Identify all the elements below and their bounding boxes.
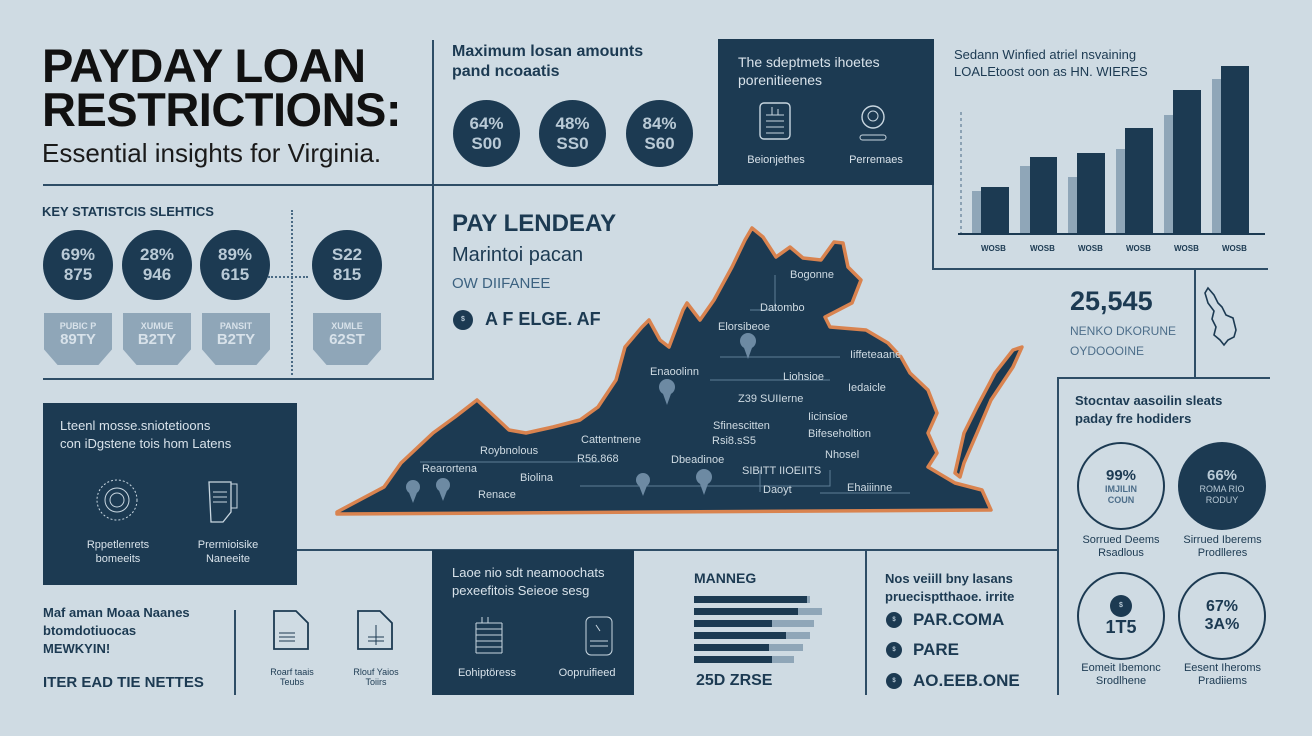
- legend marker: A F ELGE. AF: [485, 309, 601, 329]
- map: Virginia: Datombo: [760, 302, 805, 314]
- list: payday loan providers: pruecisptthaoe. irrite: [885, 589, 1014, 604]
- list: payday loan providers: $: [892, 617, 896, 623]
- key statistics panel: XUMLE: [331, 321, 363, 331]
- panel: dark bottom middle: pexeefitois Seieoe sesg: [452, 583, 589, 598]
- panel: dark left bottom: Prermioisike Naneeite: [198, 539, 258, 565]
- list: payday loan providers: PAR.COMA: [913, 610, 1004, 629]
- map: Virginia: Nhosel: [825, 449, 859, 461]
- map: Virginia: Dbeadinoe: [671, 454, 724, 466]
- title: RESTRICTIONS:: [42, 83, 401, 136]
- panel: payday holder stats: Eesent Iheroms Pradiiems: [1184, 662, 1261, 687]
- map: Virginia: Rearortena: [422, 463, 478, 475]
- panel: dark left bottom: Rppetlenrets bomeeits: [87, 539, 149, 565]
- panel: dark requirements: [718, 39, 934, 185]
- map: Virginia: Roybnolous: [480, 445, 539, 457]
- panel: payday holder stats: RODUY: [1206, 495, 1238, 505]
- panel: dark bottom middle: Eohiptöress: [458, 667, 516, 679]
- text block bottom left: [43, 605, 204, 691]
- bar chart: Sedann Winfied atriel nsvaining: [954, 47, 1136, 62]
- panel: dark bottom middle: [432, 550, 634, 695]
- panel: dark requirements: The sdeptmets ihoetes: [738, 54, 880, 70]
- bar chart: [954, 47, 1265, 253]
- panel: max loan amounts: 48%: [555, 114, 590, 133]
- key statistics panel: B2TY: [217, 331, 255, 348]
- text block bottom left: MEWKYIN!: [43, 641, 110, 656]
- map: Virginia: Enaoolinn: [650, 366, 699, 378]
- panel: payday holder stats: IMJILIN: [1105, 484, 1137, 494]
- panel: max loan amounts: S00: [471, 134, 502, 152]
- map: Virginia: Daoyt: [763, 484, 792, 496]
- text block bottom left: ITER EAD TIE NETTES: [43, 674, 204, 691]
- panel: payday holder stats: Sirrued Iberems Prodlleres: [1183, 534, 1262, 559]
- bar chart: WOSB: [1174, 244, 1199, 253]
- map: Virginia: Iedaicle: [848, 382, 886, 394]
- key statistics panel: [42, 204, 382, 365]
- map: Virginia: Iicinsioe: [808, 411, 848, 423]
- map: Virginia: Elorsibeoe: [718, 321, 770, 333]
- icons: forms: Teubs: [280, 677, 304, 687]
- key statistics panel: 69%: [61, 245, 95, 264]
- map: Virginia: Ehaiiinne: [847, 482, 892, 494]
- horizontal bar chart: [694, 570, 822, 689]
- key statistics panel: 28%: [140, 245, 174, 264]
- key statistics panel: 875: [64, 265, 92, 284]
- bar chart: WOSB: [1030, 244, 1055, 253]
- map: Virginia: Liohsioe: [783, 371, 824, 383]
- map heading: OW DIIFANEE: [452, 275, 550, 292]
- panel: max loan amounts: Maximum losan amounts: [452, 43, 643, 60]
- key statistics panel: KEY STATISTCIS SLEHTICS: [42, 204, 214, 219]
- list: payday loan providers: [885, 571, 1020, 690]
- panel: payday holder stats: COUN: [1108, 495, 1134, 505]
- list: payday loan providers: PARE: [913, 640, 959, 659]
- icon: person: [860, 105, 886, 140]
- key statistics panel: 89%: [218, 245, 252, 264]
- map heading: PAY LENDEAY: [452, 210, 616, 237]
- bar chart: WOSB: [1078, 244, 1103, 253]
- key statistics panel: PUBIC P: [60, 321, 96, 331]
- text block bottom left: btomdotiuocas: [43, 623, 136, 638]
- icons: forms: Rlouf Yaios: [353, 667, 399, 677]
- panel: payday holder stats: paday fre hodiders: [1075, 411, 1191, 426]
- key statistics panel: 62ST: [329, 331, 365, 348]
- stat: 25,545: 25,545: [1070, 286, 1153, 316]
- panel: payday holder stats: 67%: [1206, 598, 1238, 615]
- list: payday loan providers: $: [892, 647, 896, 653]
- bar chart: WOSB: [1222, 244, 1247, 253]
- icons: forms: Roarf taais: [270, 667, 314, 677]
- title: [42, 39, 401, 168]
- key statistics panel: PANSIT: [220, 321, 252, 331]
- key statistics panel: 946: [143, 265, 171, 284]
- icon: ledger: [586, 616, 612, 656]
- legend marker: $: [461, 316, 465, 323]
- map: Virginia: Rsi8.sS5: [712, 435, 756, 447]
- key statistics panel: S22: [332, 245, 362, 264]
- horizontal bar chart: MANNEG: [694, 570, 756, 586]
- panel: payday holder stats: ROMA RIO: [1199, 484, 1244, 494]
- panel: dark bottom middle: Oopruifieed: [559, 667, 615, 679]
- horizontal bar chart: 25D ZRSE: [696, 672, 772, 689]
- icons: forms: Toiirs: [365, 677, 386, 687]
- map: Virginia: Sfinescitten: [713, 420, 770, 432]
- icon: state outline: [1204, 286, 1237, 346]
- panel: dark requirements: porenitieenes: [738, 72, 822, 88]
- stat: 25,545: NENKO DKORUNE: [1070, 324, 1176, 338]
- panel: dark left bottom: [43, 403, 297, 585]
- panel: payday holder stats: 66%: [1207, 467, 1237, 484]
- map: Virginia: Renace: [478, 489, 516, 501]
- icon: document: [208, 481, 238, 523]
- panel: max loan amounts: SS0: [556, 134, 589, 152]
- panel: payday holder stats: Eomeit Ibemonc Srodlhene: [1081, 662, 1161, 687]
- panel: dark requirements: Perremaes: [849, 154, 903, 166]
- key statistics panel: B2TY: [138, 331, 176, 348]
- title: PAYDAY LOAN: [42, 39, 366, 92]
- panel: dark left bottom: Lteenl mosse.sniotetioons: [60, 418, 210, 433]
- panel: max loan amounts: pand ncoaatis: [452, 63, 560, 80]
- map: Virginia: Z39 SUIIerne: [738, 393, 803, 405]
- key statistics panel: 615: [221, 265, 249, 284]
- stat: 25,545: [1070, 286, 1176, 358]
- panel: payday holder stats: [1075, 393, 1266, 687]
- key statistics panel: 89TY: [60, 331, 96, 348]
- icons: forms: [270, 610, 399, 687]
- stat: 25,545: OYDOOOINE: [1070, 344, 1144, 358]
- panel: payday holder stats: 1T5: [1105, 617, 1137, 637]
- panel: max loan amounts: S60: [644, 134, 675, 152]
- icon: coin: [96, 480, 138, 520]
- list: payday loan providers: AO.EEB.ONE: [913, 671, 1020, 690]
- map: Virginia: Cattentnene: [581, 434, 641, 446]
- map: Virginia: Biolina: [520, 472, 554, 484]
- title: Essential insights for Virginia.: [42, 138, 381, 168]
- panel: dark left bottom: con iDgstene tois hom Latens: [60, 436, 231, 451]
- map: Virginia: R56.868: [577, 453, 619, 465]
- bar chart: LOALEtoost oon as HN. WIERES: [954, 64, 1148, 79]
- map: Virginia: Bogonne: [790, 269, 834, 281]
- list: payday loan providers: $: [892, 678, 896, 684]
- bar chart: WOSB: [1126, 244, 1151, 253]
- list: payday loan providers: Nos veiill bny lasans: [885, 571, 1013, 586]
- icon: building: [759, 102, 791, 140]
- map heading: Marintoi pacan: [452, 244, 583, 266]
- key statistics panel: XUMUE: [141, 321, 173, 331]
- panel: max loan amounts: 84%: [642, 114, 677, 133]
- panel: max loan amounts: 64%: [469, 114, 504, 133]
- panel: payday holder stats: Stocntav aasoilin sleats: [1075, 393, 1222, 408]
- text block bottom left: Maf aman Moaa Naanes: [43, 605, 190, 620]
- panel: payday holder stats: 3A%: [1205, 616, 1239, 633]
- panel: payday holder stats: $: [1119, 602, 1123, 609]
- bar chart: WOSB: [981, 244, 1006, 253]
- panel: dark requirements: Beionjethes: [747, 154, 805, 166]
- key statistics panel: 815: [333, 265, 361, 284]
- panel: max loan amounts: [452, 43, 693, 167]
- panel: payday holder stats: Sorrued Deems Rsadlous: [1082, 534, 1160, 559]
- map: Virginia: SIBITT IIOEIITS: [742, 465, 821, 477]
- map: Virginia: Bifeseholtion: [808, 428, 871, 440]
- map: Virginia: Iiffeteaane: [850, 349, 901, 361]
- panel: payday holder stats: 99%: [1106, 467, 1136, 484]
- panel: dark bottom middle: Laoe nio sdt neamoochats: [452, 565, 604, 580]
- map heading: [452, 210, 616, 292]
- icon: stack: [476, 617, 502, 654]
